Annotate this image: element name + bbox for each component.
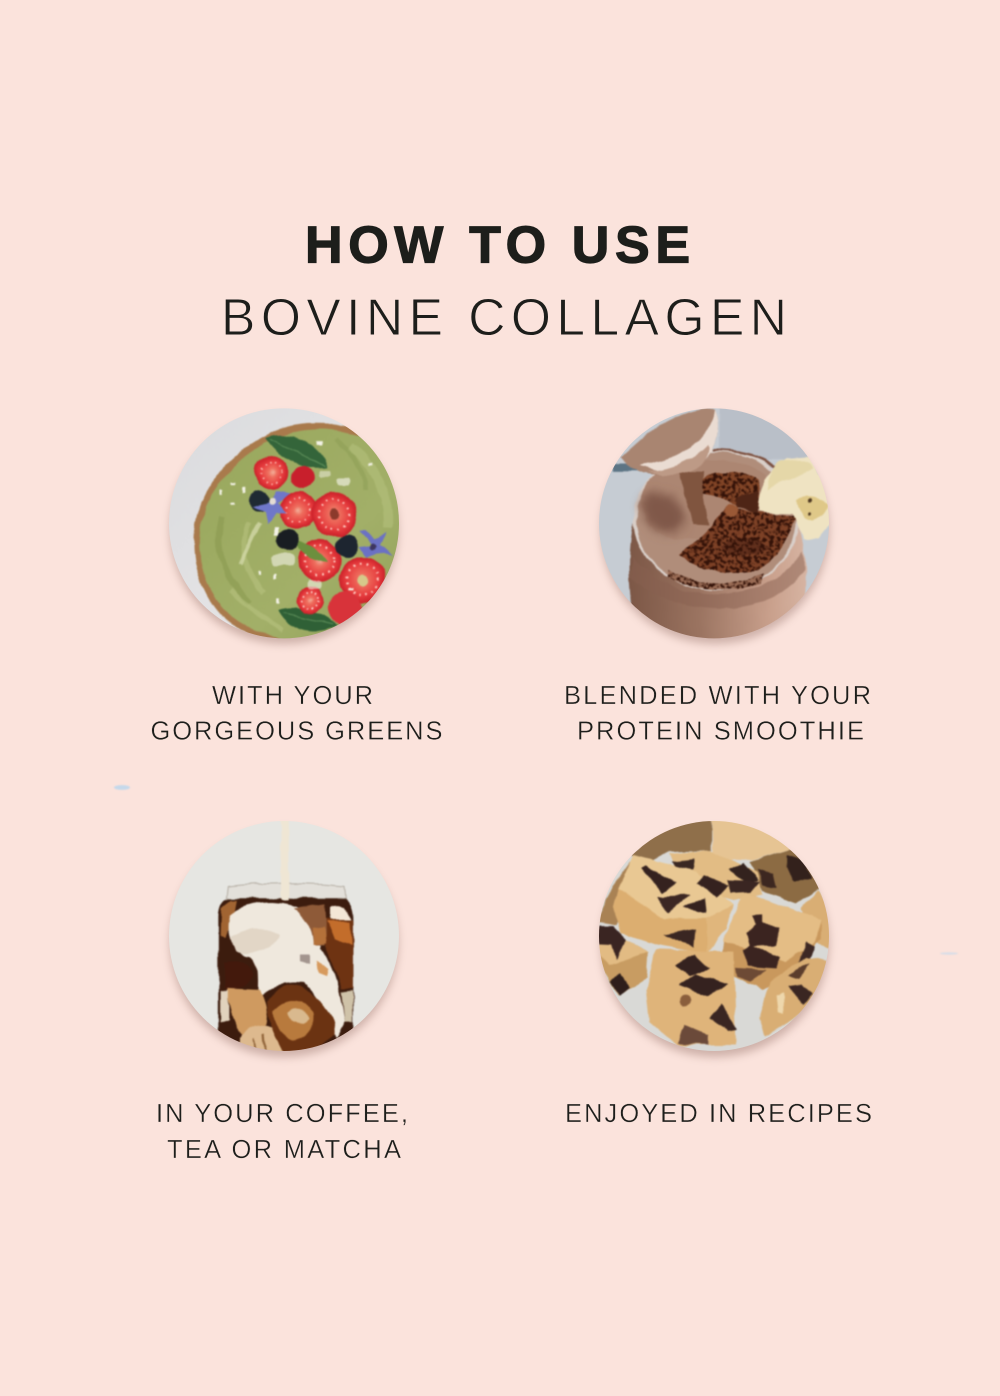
photo: chocolate smoothie <box>599 408 829 638</box>
flowers <box>253 491 289 524</box>
caption line 1: WITH YOUR <box>212 682 373 710</box>
glass body <box>630 523 806 650</box>
photo: cookie dough bars <box>599 821 829 1051</box>
speck: blue paint top left <box>114 785 130 790</box>
caption line 1: IN YOUR COFFEE, <box>156 1100 408 1128</box>
front block <box>646 949 736 1045</box>
photo shadow <box>601 829 829 1057</box>
glass rim <box>633 449 800 591</box>
title line 2: BOVINE COLLAGEN <box>221 288 787 346</box>
right bottom block <box>759 957 828 1037</box>
photo shadow <box>170 416 398 644</box>
caption <box>156 1100 408 1164</box>
photo shadow <box>170 829 398 1057</box>
back blocks <box>631 821 714 861</box>
caption line 2: GORGEOUS GREENS <box>150 718 442 746</box>
photo: iced coffee <box>169 821 399 1051</box>
milk stream <box>281 812 289 901</box>
milk <box>229 902 345 1038</box>
strawberries <box>255 456 288 489</box>
cocoa <box>668 472 797 590</box>
caramel swirls <box>227 988 267 1035</box>
coconut flakes <box>220 442 372 604</box>
caption line 2: PROTEIN SMOOTHIE <box>577 718 864 746</box>
left low block <box>600 951 649 996</box>
panel: gorgeous greens <box>150 400 442 746</box>
caption <box>564 682 871 746</box>
caption: ENJOYED IN RECIPES <box>565 1100 872 1128</box>
caption line 2: TEA OR MATCHA <box>167 1136 401 1164</box>
panel: coffee <box>156 812 410 1164</box>
blueberries <box>250 492 270 512</box>
dark band <box>225 960 253 989</box>
right block <box>715 892 822 990</box>
speck: blue paint right <box>940 952 958 955</box>
spoon and pour <box>678 472 708 525</box>
caption line 1: BLENDED WITH YOUR <box>564 682 871 710</box>
glass <box>226 883 345 898</box>
main block <box>672 918 674 919</box>
title <box>221 216 787 346</box>
photo: green smoothie bowl <box>169 408 399 638</box>
panel: protein smoothie <box>564 400 871 746</box>
banana <box>758 457 831 538</box>
panel: recipes <box>565 812 872 1128</box>
photo shadow <box>601 416 829 644</box>
title line 1: HOW TO USE <box>305 216 690 274</box>
leaves <box>265 435 327 468</box>
caption <box>150 682 442 746</box>
